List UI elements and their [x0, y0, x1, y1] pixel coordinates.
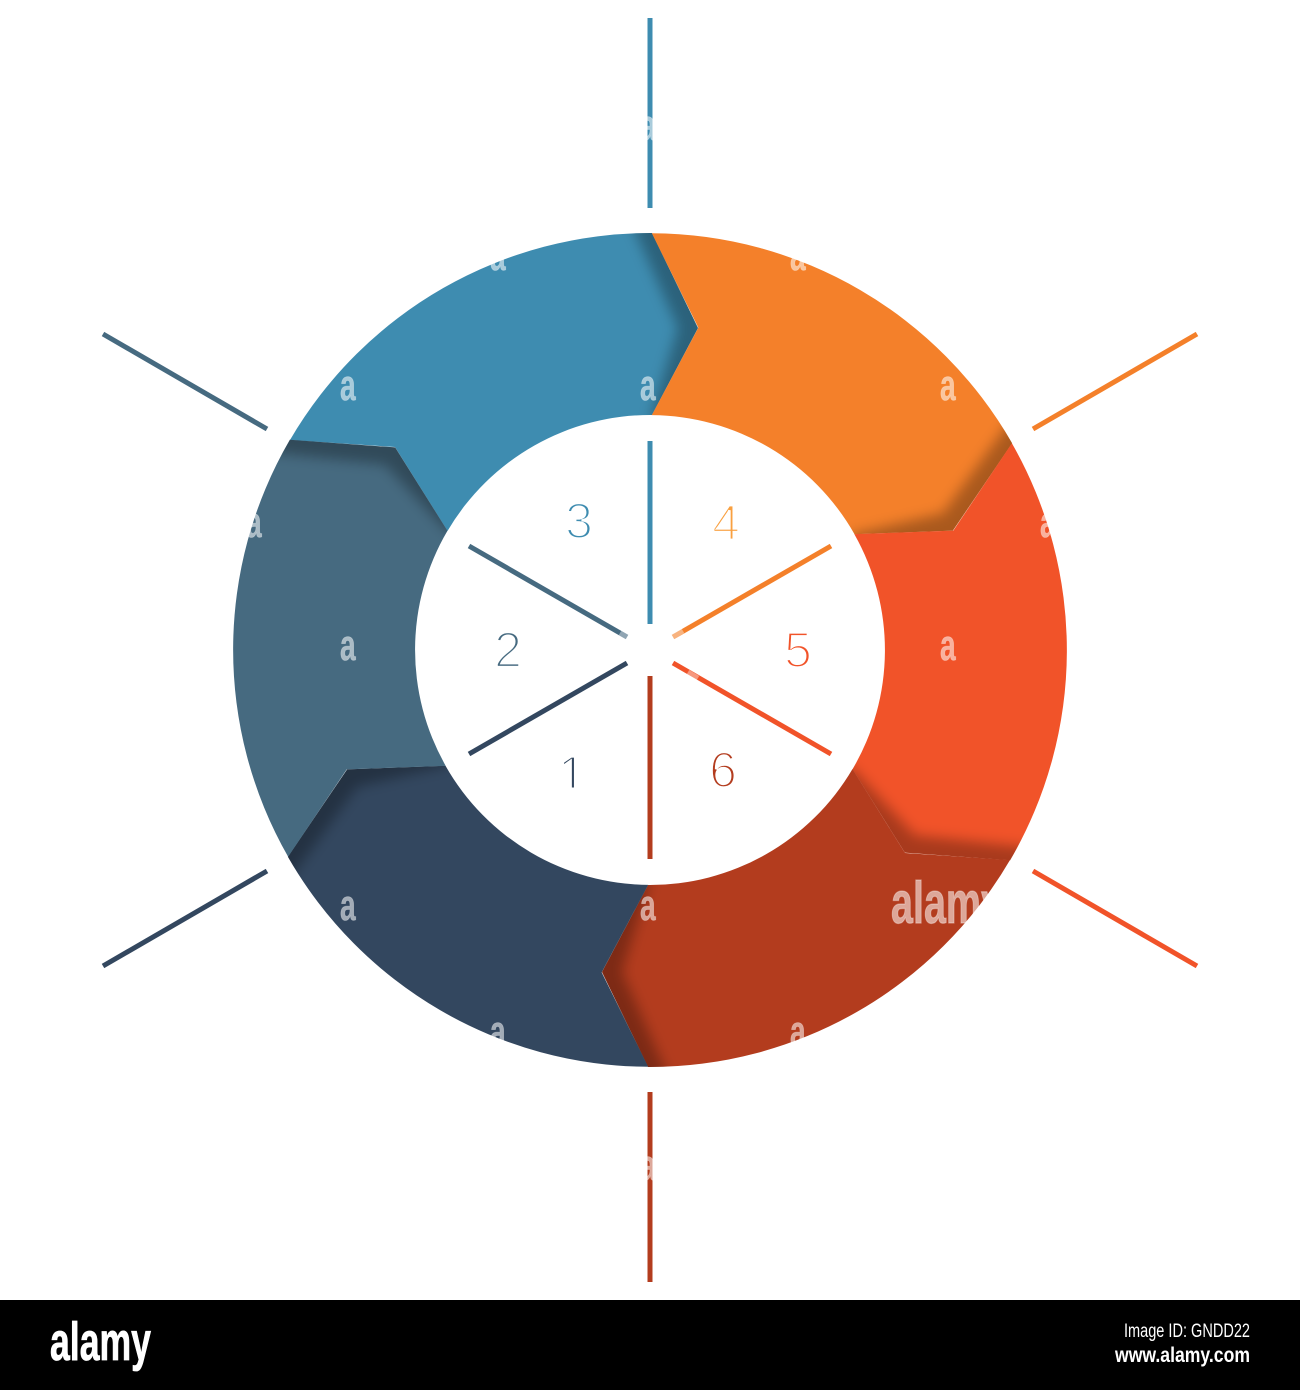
- segment 4: orange arrow: [652, 233, 1012, 534]
- outer line: lower right red-orange: [1033, 871, 1197, 966]
- watermark letters: a: [640, 1141, 656, 1190]
- watermark letters: a: [1040, 498, 1056, 547]
- segment 6: dark red arrow: [602, 769, 1010, 1067]
- segment 5: red-orange arrow: [852, 443, 1067, 860]
- segment 3: blue arrow: [290, 233, 698, 531]
- faded line ends near the centre: [620, 631, 698, 678]
- watermark letters: a: [790, 1007, 806, 1056]
- watermark letters: a: [640, 101, 656, 150]
- inner radial lines: [469, 441, 831, 859]
- watermark letters: a: [340, 621, 356, 670]
- watermark letters: a: [490, 231, 506, 280]
- arrow ring: [130, 233, 1143, 1067]
- inner line: lower left navy: [469, 663, 627, 754]
- segment 2: slate arrow: [233, 440, 448, 857]
- outer line: lower left navy: [103, 871, 267, 966]
- website: www.alamy.com: [1114, 1344, 1250, 1367]
- number 3: 3: [565, 493, 593, 549]
- watermark letters: [246, 101, 1056, 1190]
- number 5: 5: [784, 622, 812, 678]
- number 2: 2: [494, 622, 522, 678]
- watermark letters: a: [790, 231, 806, 280]
- watermark letters: a: [940, 621, 956, 670]
- number 6: 6: [709, 742, 737, 798]
- watermark letters: a: [640, 361, 656, 410]
- number 1: 1: [558, 746, 586, 802]
- segment 1: navy arrow: [288, 766, 648, 1067]
- watermark logo: alamy: [891, 870, 1003, 936]
- image id: Image ID: GNDD22: [1124, 1321, 1250, 1342]
- outer line: upper right orange: [1033, 334, 1197, 429]
- watermark letters: a: [490, 1007, 506, 1056]
- inner line: upper right orange: [673, 546, 831, 637]
- inner line: upper left slate: [469, 546, 627, 637]
- watermark letters: a: [340, 361, 356, 410]
- inner line: bottom dark red: [648, 676, 652, 859]
- inner line: lower right red-orange: [673, 663, 831, 754]
- outer line: top blue: [648, 18, 652, 208]
- footer logo: alamy: [50, 1312, 151, 1372]
- number 4: 4: [712, 495, 740, 551]
- outer radial lines: [103, 18, 1197, 1282]
- watermark letters: a: [340, 881, 356, 930]
- step numbers: [494, 493, 812, 802]
- inner line: top blue: [648, 441, 652, 624]
- watermark letters: a: [640, 881, 656, 930]
- watermark letters: a: [940, 361, 956, 410]
- watermark letters: a: [246, 498, 262, 547]
- footer bar: [0, 1300, 1300, 1390]
- outer line: upper left slate: [103, 334, 267, 429]
- outer line: bottom dark red: [648, 1092, 652, 1282]
